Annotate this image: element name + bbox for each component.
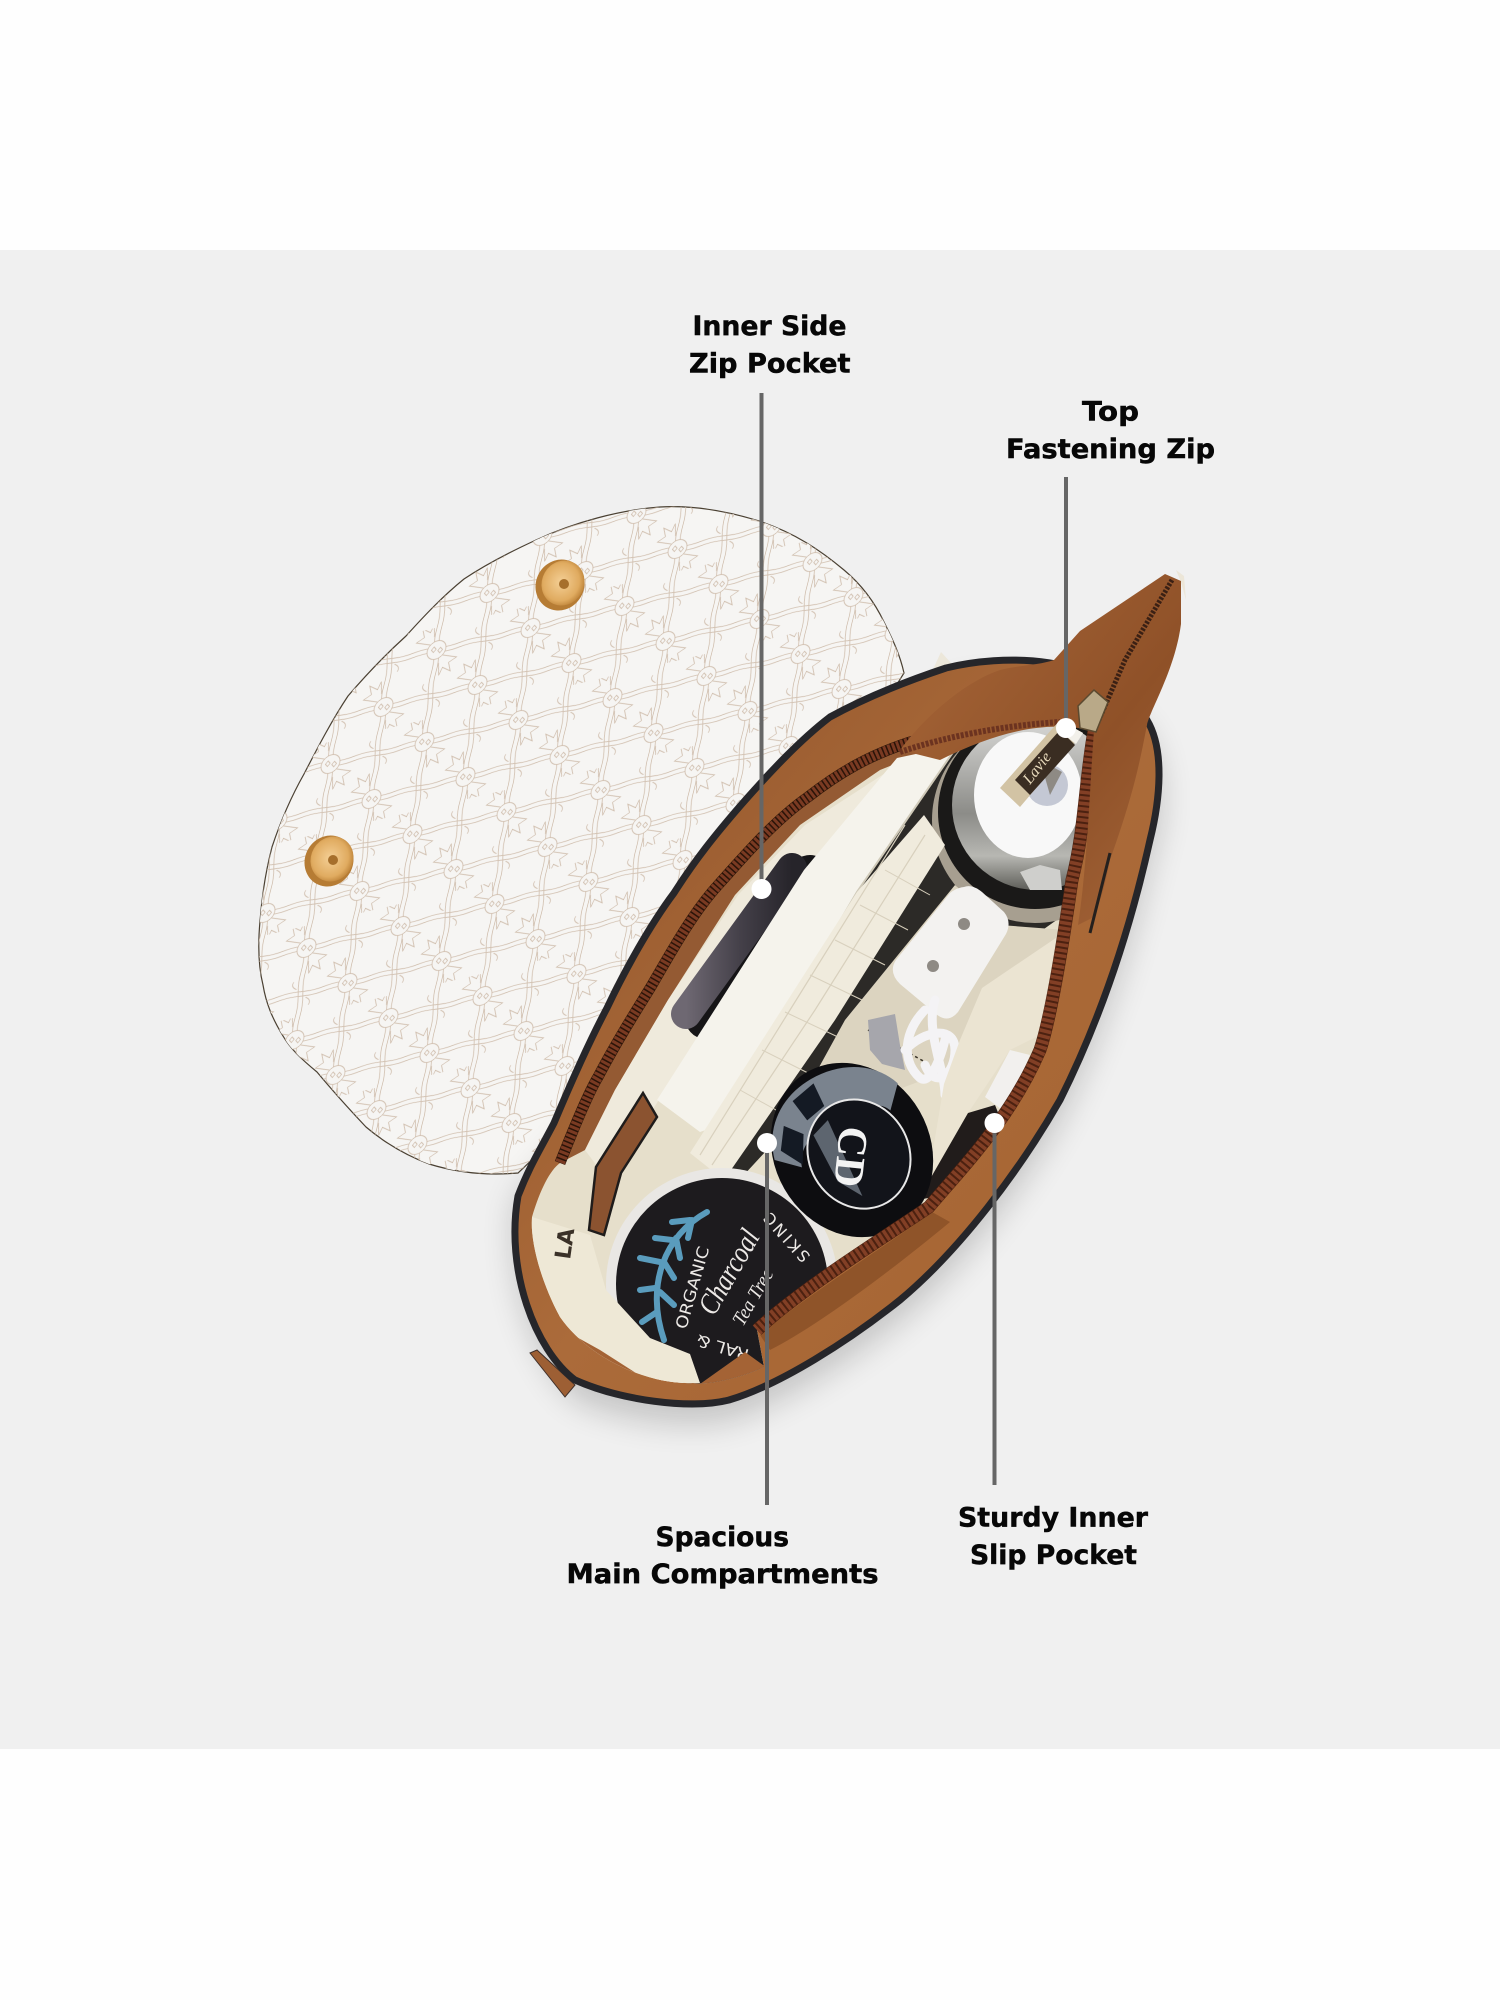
compact logo: CD xyxy=(824,1124,876,1189)
magnet: upper xyxy=(526,550,594,620)
bag strap tab xyxy=(530,1350,575,1397)
infographic canvas xyxy=(0,250,1500,1749)
power bank in side pocket xyxy=(686,868,810,1018)
callout: Inner Side Zip Pocket: Zip Pocket xyxy=(689,348,851,380)
white box in slip pocket xyxy=(985,1050,1030,1112)
dark slip pocket opening xyxy=(924,1105,998,1199)
dark gap behind items xyxy=(732,751,1056,1171)
lower copper inner fold xyxy=(578,1338,636,1373)
white plug adapter xyxy=(893,886,1009,1019)
jar lettering: Tea Tree xyxy=(728,1265,778,1330)
flap: monogram lining with magnets xyxy=(259,507,904,1174)
lower-right pocket edge under zip xyxy=(760,1212,950,1350)
bag body with black piping and copper rim xyxy=(515,660,1159,1404)
cream inner pocket xyxy=(585,770,890,1170)
callout: Spacious Main Compartments: Spacious xyxy=(656,1522,789,1553)
cream floor under plug xyxy=(819,885,1058,1088)
leaf sprig xyxy=(640,1212,707,1340)
black Dior compact xyxy=(771,1062,934,1238)
callout: Spacious Main Compartments xyxy=(566,1133,878,1590)
callout: Top Fastening Zip: Fastening Zip xyxy=(1006,434,1215,465)
cream fabric right wall xyxy=(942,938,1056,1100)
zipper lower teeth onto tape xyxy=(900,722,1060,752)
lining label letters: LA xyxy=(551,1227,580,1261)
rim pocket slit xyxy=(1090,853,1110,933)
cream lining base xyxy=(532,766,1060,1384)
jar lettering xyxy=(676,1212,810,1358)
grid notebook xyxy=(690,815,945,1180)
callout: Sturdy Inner Slip Pocket: Sturdy Inner xyxy=(958,1502,1149,1534)
white coiled cable xyxy=(905,1000,955,1095)
grey connector xyxy=(868,1014,905,1070)
callout: Sturdy Inner Slip Pocket xyxy=(958,1113,1149,1571)
bag shadow xyxy=(514,681,1162,1424)
jar lettering: RAL & xyxy=(694,1330,751,1364)
cream fabric bunch xyxy=(530,1217,700,1385)
magnet: lower xyxy=(295,826,363,896)
callout: Spacious Main Compartments: Main Compartments xyxy=(566,1559,878,1590)
jar lettering: Charcoal xyxy=(691,1223,767,1320)
callout: Inner Side Zip Pocket xyxy=(689,311,851,899)
callout: Top Fastening Zip: Top xyxy=(1082,396,1139,428)
zip slider and pull xyxy=(1000,690,1108,807)
floor stitching xyxy=(868,1030,925,1062)
brown pocket lining xyxy=(560,735,930,1163)
zipper tape top xyxy=(900,570,1186,925)
callout: Sturdy Inner Slip Pocket: Slip Pocket xyxy=(970,1540,1137,1571)
left inner zipper xyxy=(560,717,1054,1163)
interior contents xyxy=(532,726,1088,1384)
white notebook xyxy=(657,745,958,1132)
flap hem corner xyxy=(930,652,958,676)
jar lettering: SKINC xyxy=(760,1209,814,1266)
zip pull logo: Lavie xyxy=(1019,749,1055,788)
jar lettering: ORGANIC xyxy=(672,1244,713,1331)
inner side pocket brown edge xyxy=(589,1093,657,1235)
right main zipper xyxy=(757,731,1094,1330)
background panel xyxy=(0,250,1500,1749)
callout: Inner Side Zip Pocket: Inner Side xyxy=(692,311,846,342)
skincare jar xyxy=(606,1168,838,1400)
callout: Top Fastening Zip xyxy=(1006,396,1215,738)
silver jar xyxy=(932,726,1088,923)
